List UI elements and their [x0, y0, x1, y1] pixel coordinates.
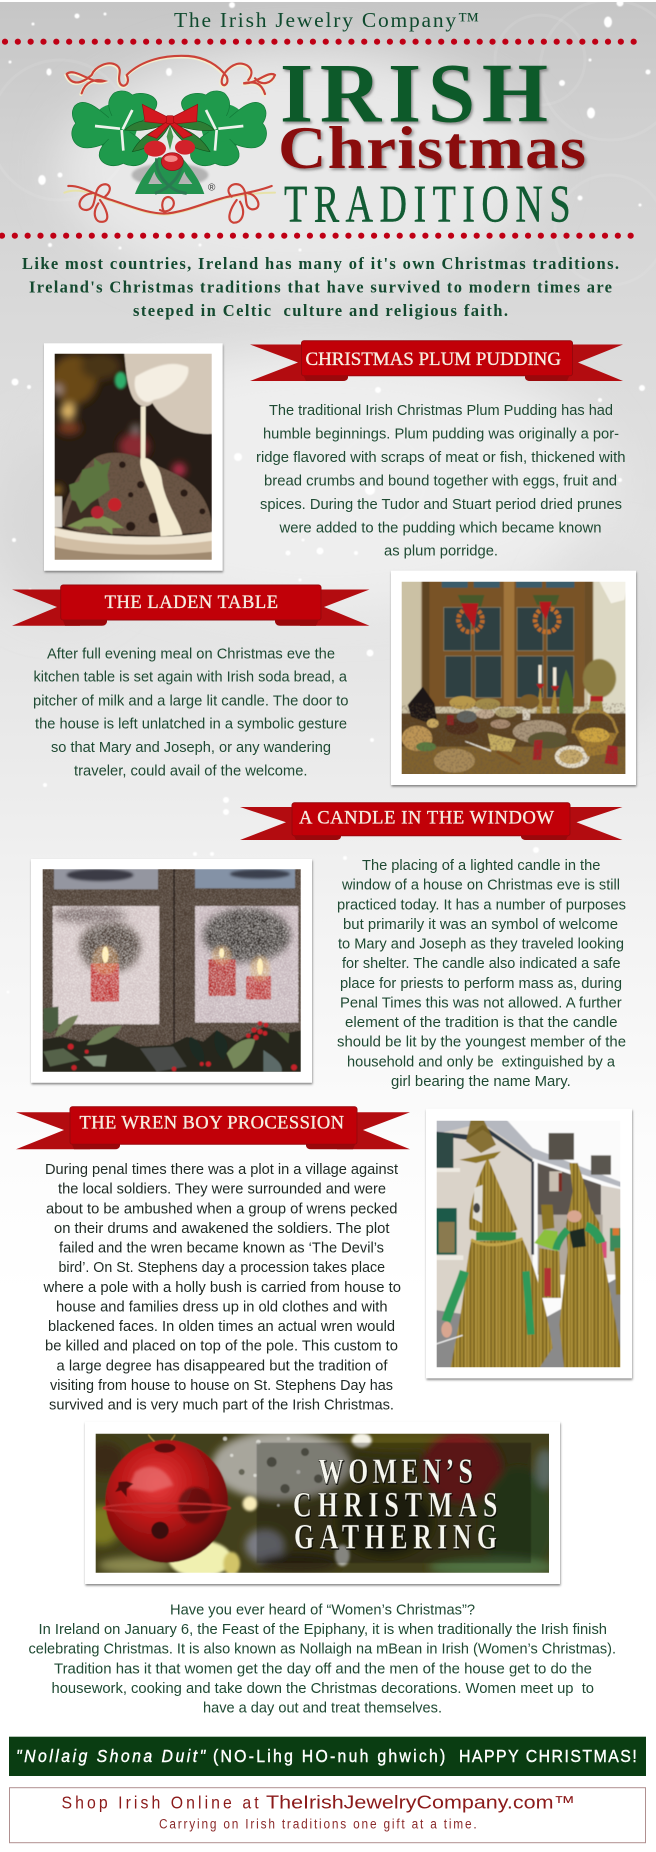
bottom dotted divider: [2, 233, 636, 239]
body text: blackened faces. In olden times an actual wren would: [48, 1319, 395, 1335]
panel: Christmas plum pudding: [44, 341, 626, 571]
banner: THE WREN BOY PROCESSION: [80, 1114, 344, 1134]
berries: [144, 140, 195, 171]
body text: [337, 858, 626, 1090]
body text: Have you ever heard of “Women’s Christmas”?: [170, 1602, 475, 1618]
body text: girl bearing the name Mary.: [391, 1074, 571, 1090]
body text: ridge flavored with scraps of meat or fish, thickened with: [256, 450, 626, 466]
photo frame: [85, 1422, 560, 1584]
trinity knot: [135, 157, 204, 194]
logo: shamrocks, bow and ribbons: [64, 56, 275, 223]
body text: The placing of a lighted candle in the: [362, 858, 600, 874]
body text: house and families dress up in old clothes and with: [56, 1299, 388, 1315]
body text: [33, 646, 348, 779]
body text: pitcher of milk and a large lit candle. The door to: [33, 693, 348, 709]
body text: on their drums and awakened the soldiers. The plot: [54, 1221, 390, 1237]
body text: During penal times there was a plot in a village against: [45, 1162, 398, 1178]
body text: [28, 1602, 616, 1717]
body text: for shelter. The candle also indicated a safe: [342, 956, 620, 972]
body text: visiting from house to house on St. Stephens Day has: [50, 1378, 393, 1394]
body text: where a pole with a holly bush is carried from house to: [42, 1280, 401, 1296]
photo: wren boys in straw costumes: [436, 1120, 620, 1368]
body text: [256, 403, 626, 560]
body text: The traditional Irish Christmas Plum Pudding has had: [269, 403, 613, 419]
title line: Christmas: CHRISTMAS: [293, 1484, 497, 1524]
body text: as plum porridge.: [384, 544, 498, 560]
body text: window of a house on Christmas eve is still: [341, 878, 620, 894]
company name: The Irish Jewelry Company™: [174, 8, 479, 32]
body text: about to be ambushed when a group of wrens pecked: [46, 1201, 398, 1217]
photo: red bell ornament with title: [96, 1434, 549, 1573]
body text: After full evening meal on Christmas eve the: [47, 646, 335, 662]
greeting bar: (NO-Lihg HO-nuh ghwich): [213, 1746, 445, 1766]
photo frame: [44, 343, 223, 571]
body text: to Mary and Joseph as they traveled looking: [338, 936, 624, 952]
body text: In Ireland on January 6, the Feast of the Epiphany, it is when traditionally the Irish finish: [38, 1622, 607, 1638]
body text: the house is left unlatched in a symbolic gesture: [35, 717, 347, 733]
banner: [12, 585, 370, 626]
red bow: [142, 104, 198, 138]
photo frame: [391, 571, 636, 785]
ribbon top: [64, 56, 275, 223]
banner: A CANDLE IN THE WINDOW: [299, 808, 555, 828]
registered mark: ®: [208, 183, 216, 194]
body text: spices. During the Tudor and Stuart period dried prunes: [260, 497, 622, 513]
shop call to action box: Carrying on Irish traditions one gift at a time.: [159, 1816, 477, 1832]
body text: be killed and placed on top of the pole. This custom to: [45, 1339, 398, 1355]
body text: were added to the pudding which became known: [278, 520, 602, 536]
photo frame: [31, 859, 312, 1083]
body text: should be lit by the youngest member of the: [337, 1035, 626, 1051]
intro text: steeped in Celtic culture and religious faith.: [133, 301, 508, 320]
greeting bar: [9, 1737, 646, 1776]
shop call to action box: TheIrishJewelryCompany.com™: [266, 1792, 575, 1812]
body text: have a day out and treat themselves.: [203, 1701, 442, 1717]
left shamrock: [72, 91, 157, 166]
body text: Tradition has it that women get the day off and the men of the house get to do the: [54, 1661, 592, 1677]
body text: kitchen table is set again with Irish soda bread, a: [34, 670, 347, 686]
greeting bar: HAPPY CHRISTMAS!: [459, 1746, 637, 1766]
body text: housework, cooking and take down the Christmas decorations. Women meet up to: [52, 1681, 594, 1697]
body text: but primarily it was an symbol of welcome: [343, 917, 618, 933]
title: TRADITIONS: TRADITIONS: [284, 175, 571, 233]
body text: traveler, could avail of the welcome.: [74, 763, 308, 779]
body text: bird’. On St. Stephens day a procession takes place: [58, 1260, 385, 1276]
shop call to action box: Shop Irish Online at: [62, 1792, 259, 1813]
banner: [16, 1107, 410, 1149]
holly leaves: [125, 120, 214, 152]
photo frame: [426, 1109, 632, 1378]
photo: laden table at window: [402, 582, 626, 774]
body text: so that Mary and Joseph, or any wandering: [51, 740, 331, 756]
body text: Penal Times this was not allowed. A further: [340, 995, 622, 1011]
body text: bread crumbs and bound together with eggs, fruit and: [264, 473, 617, 489]
body text: survived and is very much part of the Irish Christmas.: [49, 1398, 394, 1414]
body text: household and only be extinguished by a: [347, 1054, 615, 1070]
body text: humble beginnings. Plum pudding was originally a por-: [263, 426, 619, 442]
panel: a candle in the window: [31, 803, 626, 1090]
body text: element of the tradition is that the candle: [345, 1015, 618, 1031]
photo: pudding with cream: [54, 354, 212, 560]
title line: Women's: WOMEN’S: [318, 1451, 473, 1491]
body text: place for priests to perform mass as, during: [340, 976, 622, 992]
panel: women's Christmas gathering: [28, 1422, 616, 1717]
intro text: Like most countries, Ireland has many of it's own Christmas traditions.: [22, 254, 619, 273]
body text: failed and the wren became known as ‘The Devil’s: [59, 1240, 384, 1256]
banner: [240, 803, 622, 840]
body text: practiced today. It has a number of purposes: [337, 897, 626, 913]
banner: [250, 341, 623, 381]
panel: the laden table: [12, 571, 636, 785]
panel: the wren boy procession: [16, 1107, 632, 1414]
right shamrock: [181, 91, 267, 166]
shadow under knot: [132, 163, 208, 187]
shop call to action box: [10, 1788, 646, 1843]
body text: the local soldiers. They were surrounded and were: [58, 1182, 386, 1198]
intro text: Ireland's Christmas traditions that have survived to modern times are: [29, 278, 612, 296]
banner: CHRISTMAS PLUM PUDDING: [306, 350, 561, 370]
photo: candles in a frosted window: [42, 869, 301, 1072]
title: IRISH: IRISH: [280, 47, 548, 141]
banner: THE LADEN TABLE: [105, 593, 278, 613]
body text: a large degree has disappeared but the tradition of: [56, 1358, 389, 1374]
body text: celebrating Christmas. It is also known as Nollaigh na mBean in Irish (Women’s Christmas).: [28, 1642, 616, 1658]
body text: [42, 1162, 401, 1414]
title: Christmas: Christmas: [278, 114, 586, 181]
title line: Gathering: GATHERING: [294, 1517, 497, 1557]
greeting bar: "Nollaig Shona Duit": [16, 1746, 206, 1766]
intro text: [22, 254, 619, 320]
top dotted divider: [5, 39, 640, 45]
